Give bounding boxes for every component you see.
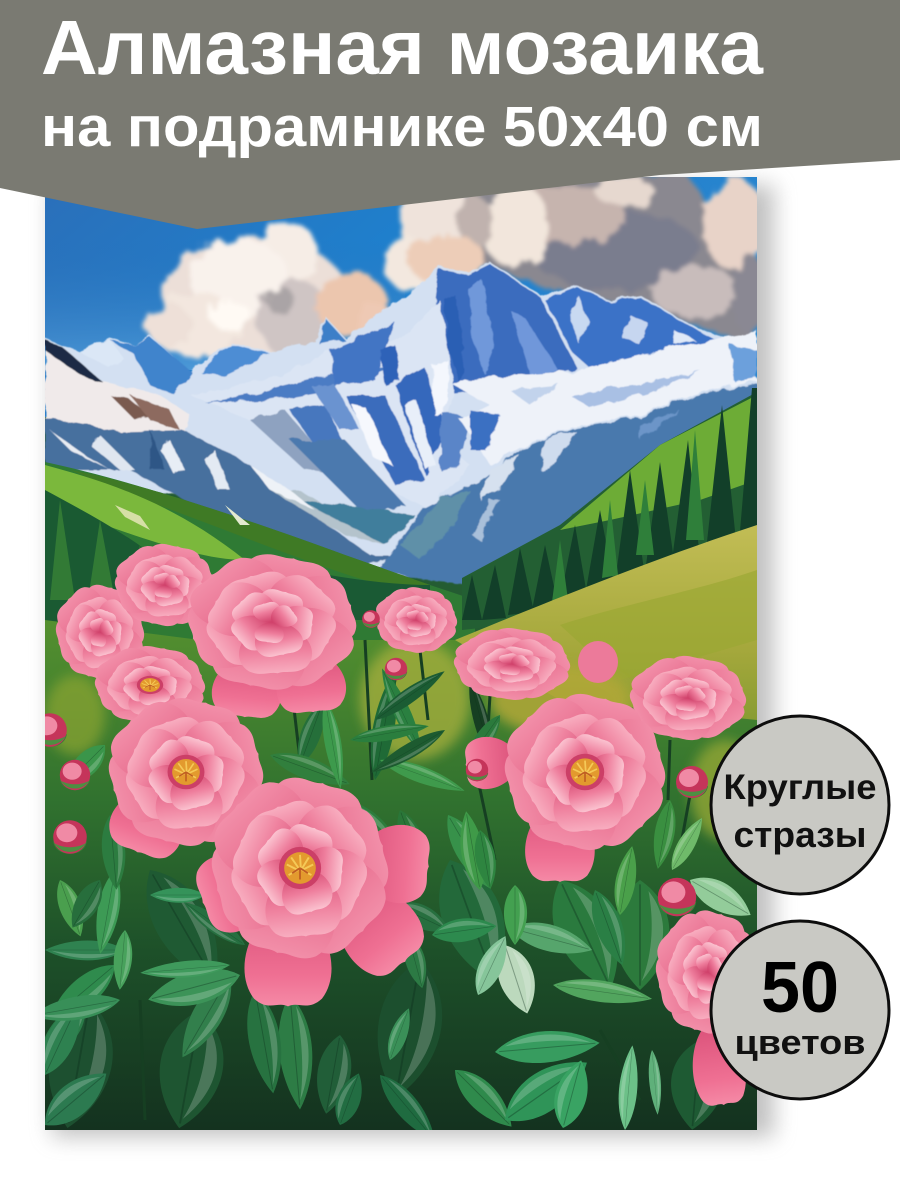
right slate slope bbox=[378, 382, 757, 585]
sky bbox=[45, 177, 757, 417]
far left peaks bbox=[110, 337, 192, 395]
flower: left middle bbox=[94, 646, 206, 720]
stems bbox=[140, 640, 690, 1120]
left forest hill bbox=[45, 462, 475, 640]
left cumulus cloud bbox=[160, 238, 350, 362]
badge: round rhinestones: стразы bbox=[734, 814, 866, 855]
left snow shoulder bbox=[45, 350, 190, 434]
badge: 50 colours: 50 bbox=[761, 948, 839, 1028]
banner shape bbox=[0, 0, 900, 229]
flower: top-left second bbox=[114, 544, 212, 626]
flower: left large bbox=[108, 698, 264, 858]
central massif base and streaks bbox=[210, 300, 462, 506]
lower foliage field bbox=[45, 620, 760, 1130]
secondary peak right bbox=[545, 287, 720, 368]
mountains bbox=[45, 262, 757, 585]
flower: right top bbox=[454, 628, 570, 700]
title: Алмазная мозаика bbox=[41, 5, 764, 91]
right meadow bbox=[455, 525, 757, 720]
main peak blue face bbox=[430, 264, 577, 395]
badge: 50 colours bbox=[711, 921, 889, 1099]
massif silhouette bbox=[45, 262, 757, 580]
right forest bbox=[462, 388, 757, 630]
badge: 50 colours: цветов bbox=[734, 1024, 866, 1062]
valley glacier bbox=[270, 490, 385, 545]
badge: round rhinestones bbox=[711, 716, 889, 894]
right snow band bbox=[453, 332, 757, 465]
flower: far right bbox=[630, 656, 746, 740]
peony flowers bbox=[51, 540, 766, 1109]
flower: right large bbox=[463, 687, 674, 882]
flower: top-centre small bbox=[376, 587, 458, 653]
flower: far top-left bbox=[56, 584, 144, 678]
banner bbox=[0, 0, 900, 229]
clouds bbox=[146, 177, 768, 362]
right storm cloud bbox=[470, 177, 757, 345]
flower: big top centre bbox=[188, 554, 356, 718]
badge: round rhinestones: Круглые bbox=[724, 768, 876, 807]
left slate slope bbox=[45, 418, 400, 570]
flower: front large bbox=[189, 770, 435, 1006]
flower: bottom right bbox=[656, 910, 750, 1106]
buds bbox=[33, 610, 708, 916]
bud: top centre right bbox=[578, 641, 618, 683]
background shadow of canvas bbox=[52, 185, 774, 1137]
leaves bbox=[29, 665, 758, 1147]
panel: painting on stretcher bbox=[29, 177, 768, 1147]
subtitle: на подрамнике 50х40 см bbox=[41, 95, 763, 159]
